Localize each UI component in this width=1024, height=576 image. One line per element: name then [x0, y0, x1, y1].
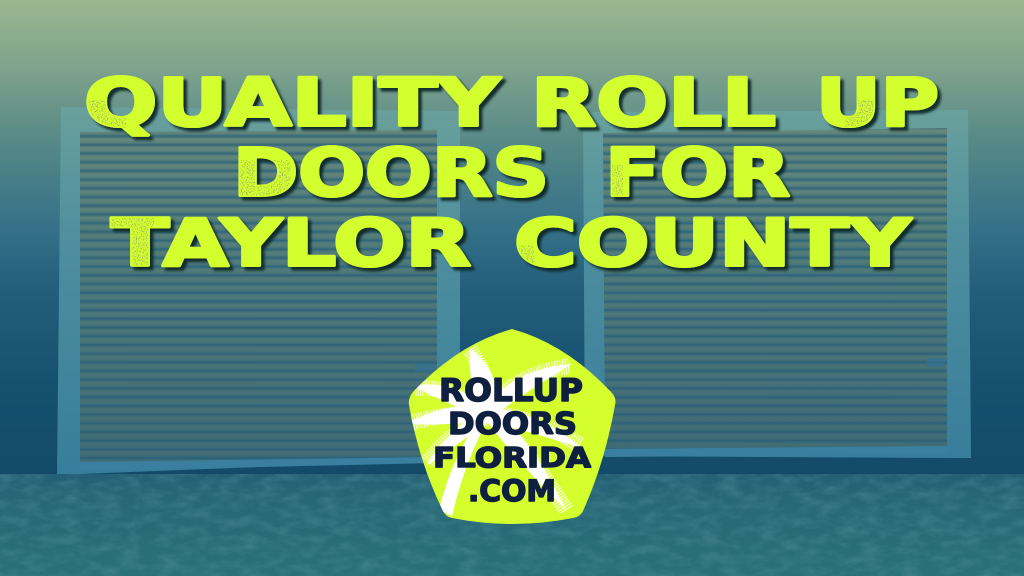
logo text [433, 373, 591, 508]
badge shape [409, 329, 616, 524]
title line 3: COUNTY [514, 206, 912, 282]
palm frond blades [406, 348, 582, 510]
right door slats [603, 128, 947, 449]
icon: palm tree [406, 348, 582, 516]
title line 2: DOORS [233, 134, 549, 212]
title line 2 [233, 134, 790, 212]
title line 3: TAYLOR [111, 206, 471, 282]
title line 2: FOR [605, 134, 790, 212]
left door frame [57, 107, 460, 474]
title [84, 64, 939, 282]
title line 1 [84, 64, 939, 142]
title line 3 [111, 206, 912, 282]
left door sill [80, 457, 437, 471]
left door handle [415, 363, 435, 372]
left door curtain [80, 130, 437, 462]
logo text: .COM [468, 474, 556, 508]
logo badge [406, 329, 616, 524]
title grunge speckles [84, 100, 885, 268]
right door frame [583, 110, 971, 458]
palm fronds feathered [408, 350, 580, 510]
right door handle [927, 358, 945, 367]
title line 1: UP [816, 64, 939, 142]
left door slats [80, 130, 437, 462]
title line 1: QUALITY [84, 64, 502, 142]
palm trunk [440, 424, 486, 516]
left roll up door [57, 107, 460, 474]
logo text: FLORIDA [433, 441, 591, 474]
ground: grass [0, 474, 1024, 576]
logo text: ROLLUP [439, 373, 583, 409]
right roll up door [583, 110, 971, 458]
title line 1: ROLL [531, 64, 776, 142]
logo text: DOORS [448, 407, 577, 442]
right door curtain [603, 128, 947, 449]
right door sill [605, 446, 947, 457]
